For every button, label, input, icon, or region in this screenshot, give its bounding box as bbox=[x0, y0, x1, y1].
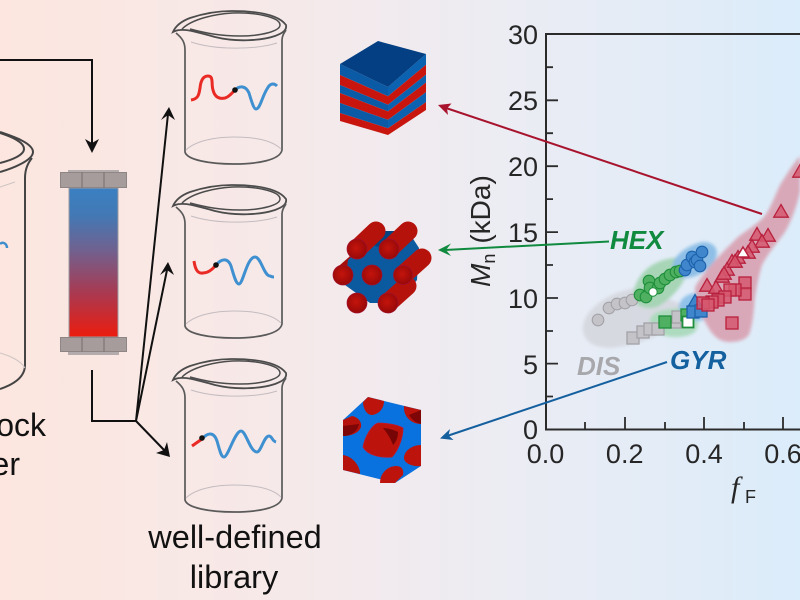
x axis numbers bbox=[527, 439, 800, 469]
GYR label: GYR bbox=[670, 345, 727, 375]
library label bbox=[147, 519, 322, 595]
library label: well-defined bbox=[147, 519, 322, 555]
beaker: short red block bbox=[173, 359, 286, 512]
y axis numbers: 30 bbox=[508, 20, 538, 50]
phase regions bbox=[583, 156, 800, 348]
pointer arrow: GYR to gyroid bbox=[440, 362, 667, 440]
morphology: lamellae bbox=[340, 41, 426, 135]
axes bbox=[545, 34, 800, 430]
x axis title: f bbox=[731, 471, 739, 504]
DIS markers bbox=[592, 294, 684, 344]
beaker: long red block bbox=[173, 11, 286, 164]
pointer arrow: LAM to lamellae bbox=[438, 104, 762, 214]
x axis numbers: 0.0 bbox=[527, 439, 564, 469]
source beaker label bbox=[0, 407, 47, 482]
HEX markers bbox=[634, 265, 694, 328]
x axis title: F bbox=[745, 487, 756, 507]
chart: phase diagram bbox=[465, 20, 800, 507]
y axis numbers: 5 bbox=[523, 350, 538, 380]
x axis numbers: 0.4 bbox=[685, 439, 723, 469]
y axis numbers: 25 bbox=[508, 86, 538, 116]
x axis numbers: 0.2 bbox=[606, 439, 643, 469]
y axis numbers: 10 bbox=[508, 284, 538, 314]
chromatography column bbox=[60, 170, 126, 355]
pointer arrow: HEX to cylinders bbox=[438, 242, 609, 256]
HEX label: HEX bbox=[610, 225, 665, 255]
GYR markers bbox=[679, 246, 708, 318]
y axis title: (kDa) bbox=[465, 175, 496, 244]
large source beaker bbox=[0, 132, 33, 389]
arrows: column to library beakers bbox=[92, 107, 175, 457]
DIS label: DIS bbox=[577, 351, 621, 381]
y axis numbers: 15 bbox=[508, 218, 538, 248]
y axis numbers: 20 bbox=[508, 152, 538, 182]
y axis numbers: 0 bbox=[523, 415, 538, 445]
morphology: hexagonal cylinders bbox=[333, 231, 422, 313]
y axis title: n bbox=[479, 254, 499, 264]
y axis numbers bbox=[508, 20, 538, 445]
library label: library bbox=[190, 559, 279, 595]
y axis title: M bbox=[465, 263, 496, 287]
beaker: medium red block bbox=[173, 185, 286, 338]
arrow: source to column bbox=[0, 60, 99, 153]
morphology: gyroid bbox=[343, 397, 421, 483]
LAM markers bbox=[697, 164, 800, 329]
